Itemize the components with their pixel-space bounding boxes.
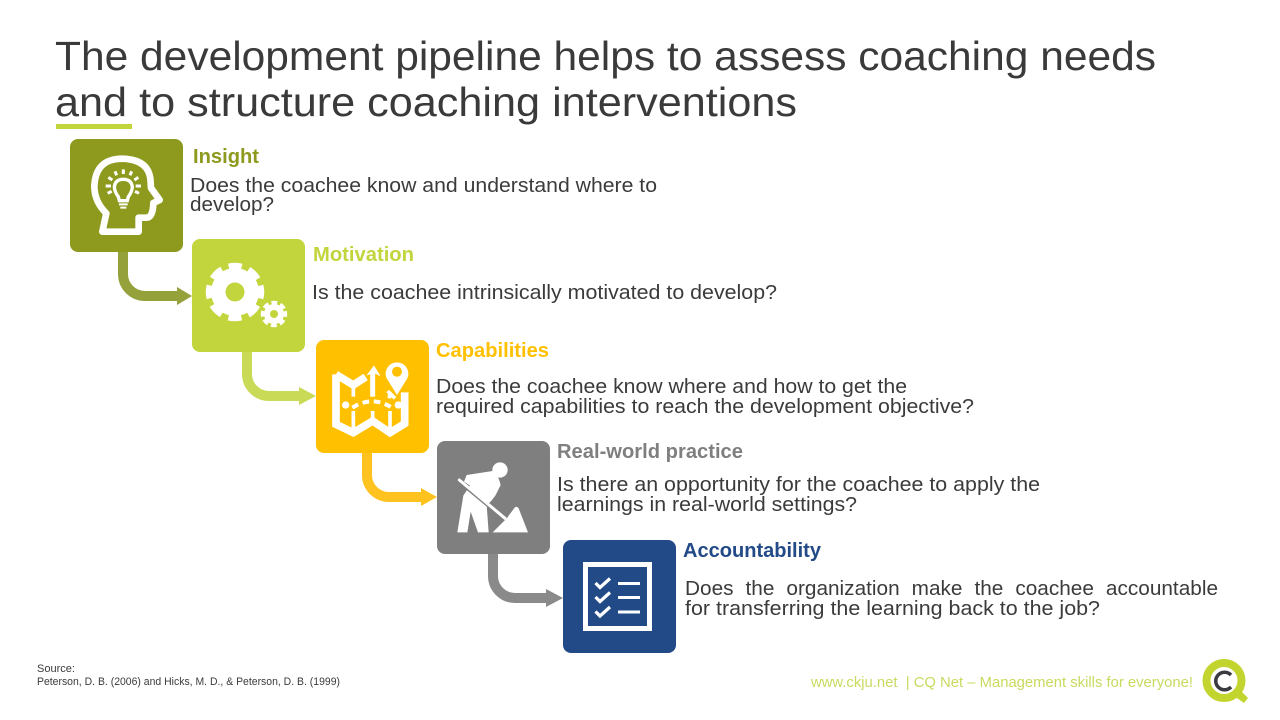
text: insight question: develop? (190, 194, 274, 216)
text: insight question: Does the coachee know and understand where to (190, 175, 657, 197)
source note (37, 663, 340, 688)
panel: insight (70, 139, 657, 252)
source note: Source: (37, 663, 75, 675)
panel: motivation (192, 239, 777, 352)
icon: worker with shovel (457, 462, 528, 532)
icon box: capabilities (316, 340, 429, 453)
icon box: insight (70, 139, 183, 252)
text: capabilities question: required capabilities to reach the development objective? (436, 396, 974, 418)
text: capabilities question (436, 376, 974, 418)
text: insight question (190, 175, 657, 216)
arrow: capabilities to real-world practice (367, 451, 437, 506)
text: accountability question (685, 578, 1218, 620)
heading: capabilities: Capabilities (436, 340, 549, 362)
icon: head with light bulb (94, 159, 160, 232)
text: real-world practice question: Is there an opportunity for the coachee to apply the (557, 474, 1040, 496)
text: accountability question: for transferring the learning back to the job? (685, 598, 1100, 620)
arrow: insight to motivation (123, 250, 192, 305)
icon: gears (203, 260, 287, 327)
text: real-world practice question (557, 474, 1040, 516)
heading: real-world practice: Real-world practice (557, 441, 743, 463)
icon: map with pin (336, 362, 408, 433)
arrow: motivation to capabilities (247, 350, 316, 405)
heading: motivation: Motivation (313, 244, 414, 266)
text: motivation question: Is the coachee intrinsically motivated to develop? (312, 282, 777, 304)
text: capabilities question: Does the coachee know where and how to get the (436, 376, 907, 398)
logo: CQ (1206, 663, 1248, 703)
title: The development pipeline helps to assess coaching needs (55, 33, 1156, 79)
text: real-world practice question: learnings in real-world settings? (557, 494, 857, 516)
title underline accent (56, 124, 132, 129)
panel: real-world practice (437, 441, 1040, 554)
icon box: motivation (192, 239, 305, 352)
title: and to structure coaching interventions (55, 79, 797, 125)
heading: accountability: Accountability (683, 540, 822, 562)
icon box: accountability (563, 540, 676, 653)
heading: insight: Insight (193, 146, 259, 168)
arrow: real-world practice to accountability (493, 552, 563, 607)
icon box: real-world practice (437, 441, 550, 554)
icon: checklist (586, 564, 650, 628)
text: accountability question: Does the organization make the coachee accountable (685, 578, 1218, 600)
panel: accountability (563, 540, 1218, 653)
panel: capabilities (316, 340, 974, 453)
source note: Peterson, D. B. (2006) and Hicks, M. D., & Peterson, D. B. (1999) (37, 676, 340, 688)
footer tagline: www.ckju.net | CQ Net – Management skills for everyone! (810, 675, 1193, 691)
title (55, 33, 1156, 125)
